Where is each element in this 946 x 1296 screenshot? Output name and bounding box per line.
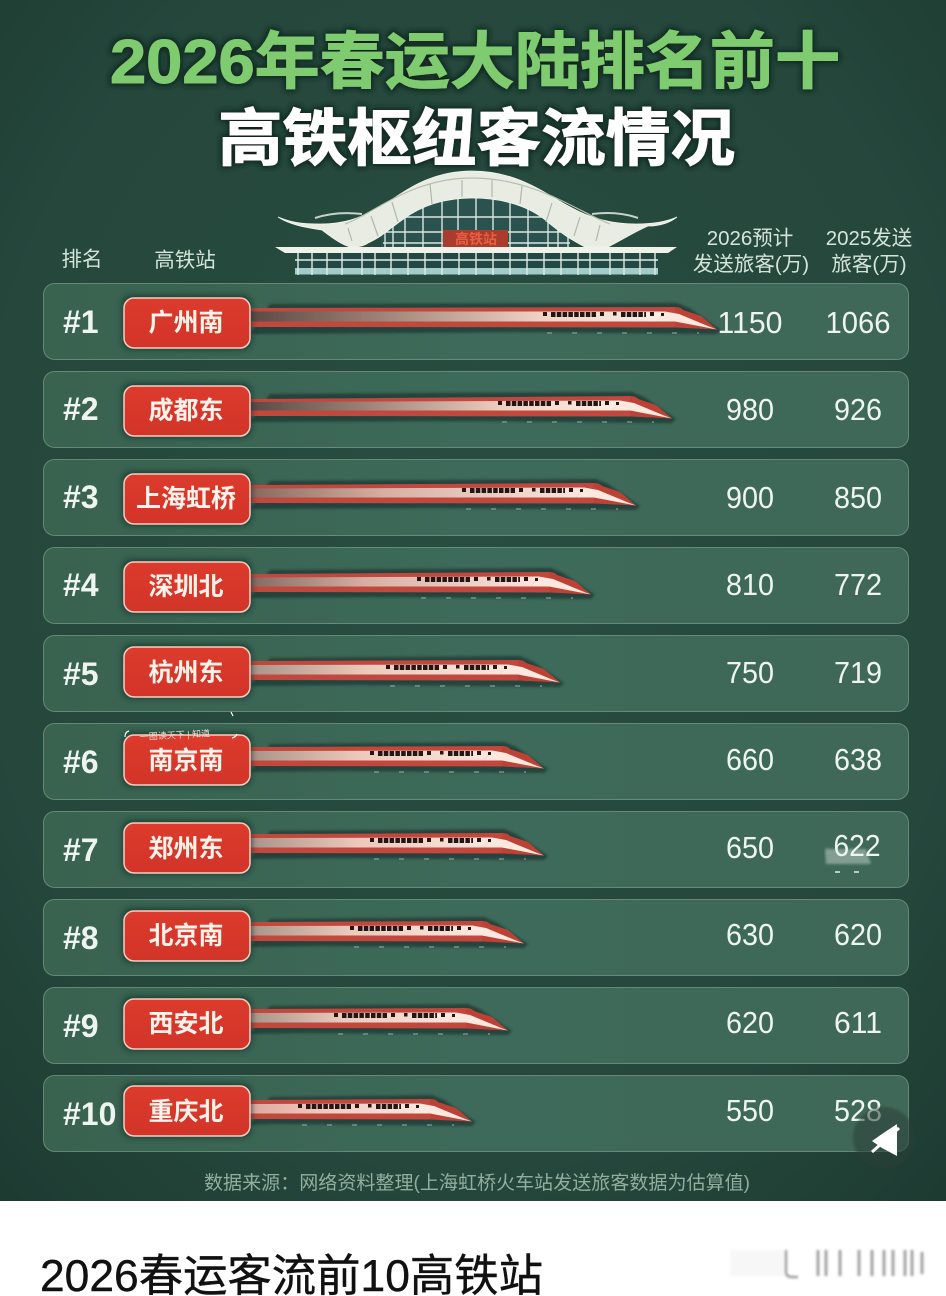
row 3: 900 [726, 480, 774, 515]
row 7 [44, 812, 908, 888]
illustration: railway station: 高铁站 [455, 231, 497, 247]
train bar: 630 [250, 917, 528, 948]
title line 2: 高铁枢纽客流情况 [218, 105, 735, 174]
row 7: 650 [726, 830, 774, 865]
row 5: #5 [63, 656, 99, 692]
row 5: 750 [726, 655, 774, 690]
row 6: 660 [726, 742, 774, 777]
watermark on badge: 一图读天下 | 知道 [140, 727, 210, 742]
row 6: #6 [63, 744, 99, 780]
row 10: 重庆北 [148, 1098, 224, 1126]
row 10 [44, 1076, 908, 1152]
row 10: 528 [834, 1093, 882, 1128]
row 1 [44, 284, 908, 360]
watermark on badge [125, 712, 237, 742]
train bar: 660 [250, 742, 548, 773]
row 8: #8 [63, 920, 99, 956]
row 10: #10 [63, 1096, 116, 1132]
header: 2025 passengers: 旅客(万) [831, 253, 907, 276]
row 7: #7 [63, 832, 99, 868]
row 1: 1150 [718, 305, 782, 340]
row 8: 620 [834, 917, 882, 952]
row 3 [44, 460, 908, 536]
header: 2026 forecast: 发送旅客(万) [693, 253, 809, 276]
row 9: 620 [726, 1005, 774, 1040]
row 9: 611 [834, 1005, 882, 1040]
header: 2026 forecast [693, 227, 809, 276]
row 3: 850 [834, 480, 882, 515]
row 4 [44, 548, 908, 624]
row 4: 810 [726, 567, 774, 602]
title line 1: 2026年春运大陆排名前十 [110, 28, 840, 97]
train bar: 900 [250, 479, 640, 510]
row 8 [44, 900, 908, 976]
header: station: 高铁站 [154, 249, 216, 272]
blurred UI remnant [730, 1250, 922, 1277]
row 6 [44, 712, 908, 800]
row 2 [44, 372, 908, 448]
row 5: 杭州东 [148, 658, 224, 687]
row 4: 772 [834, 567, 882, 602]
header: 2025 passengers [826, 227, 912, 276]
row 2: #2 [63, 391, 99, 427]
row 6: 南京南 [148, 747, 224, 775]
row 2: 980 [726, 392, 774, 427]
row 8: 630 [726, 917, 774, 952]
train bar: 1150 [250, 303, 721, 334]
header: 2026 forecast: 2026预计 [707, 227, 793, 250]
row 9 [44, 988, 908, 1064]
header: 2025 passengers: 2025发送 [826, 227, 912, 250]
illustration: railway station [275, 171, 677, 275]
row 5 [44, 636, 908, 712]
header: rank: 排名 [62, 248, 102, 271]
train bar: 750 [250, 656, 564, 687]
train bar: 620 [250, 1004, 512, 1035]
row 4: 深圳北 [148, 573, 224, 601]
row 1: #1 [63, 304, 99, 340]
row 10: 550 [726, 1093, 774, 1128]
row 4: #4 [63, 567, 99, 603]
row 7: 622 [834, 828, 880, 863]
train bar: 650 [250, 829, 548, 860]
row 2: 926 [834, 392, 882, 427]
row 8: 北京南 [148, 922, 224, 950]
data source note: 数据来源：网络资料整理(上海虹桥火车站发送旅客数据为估算值) [204, 1172, 750, 1194]
row 1: 广州南 [148, 309, 224, 337]
train bar: 550 [250, 1095, 476, 1126]
smudge near 622 [825, 848, 871, 873]
train bar: 810 [250, 568, 595, 599]
row 2: 成都东 [148, 397, 224, 425]
row 6: 638 [834, 742, 882, 777]
row 5: 719 [834, 655, 882, 690]
row 9: 西安北 [148, 1010, 224, 1038]
row 9: #9 [63, 1008, 99, 1044]
icon: muted speaker [853, 1107, 915, 1169]
row 3: #3 [63, 479, 99, 515]
train bar: 980 [250, 392, 676, 423]
row 3: 上海虹桥 [136, 485, 236, 513]
row 1: 1066 [826, 305, 890, 340]
white caption strip [0, 1201, 946, 1296]
row 7: 郑州东 [148, 835, 224, 863]
